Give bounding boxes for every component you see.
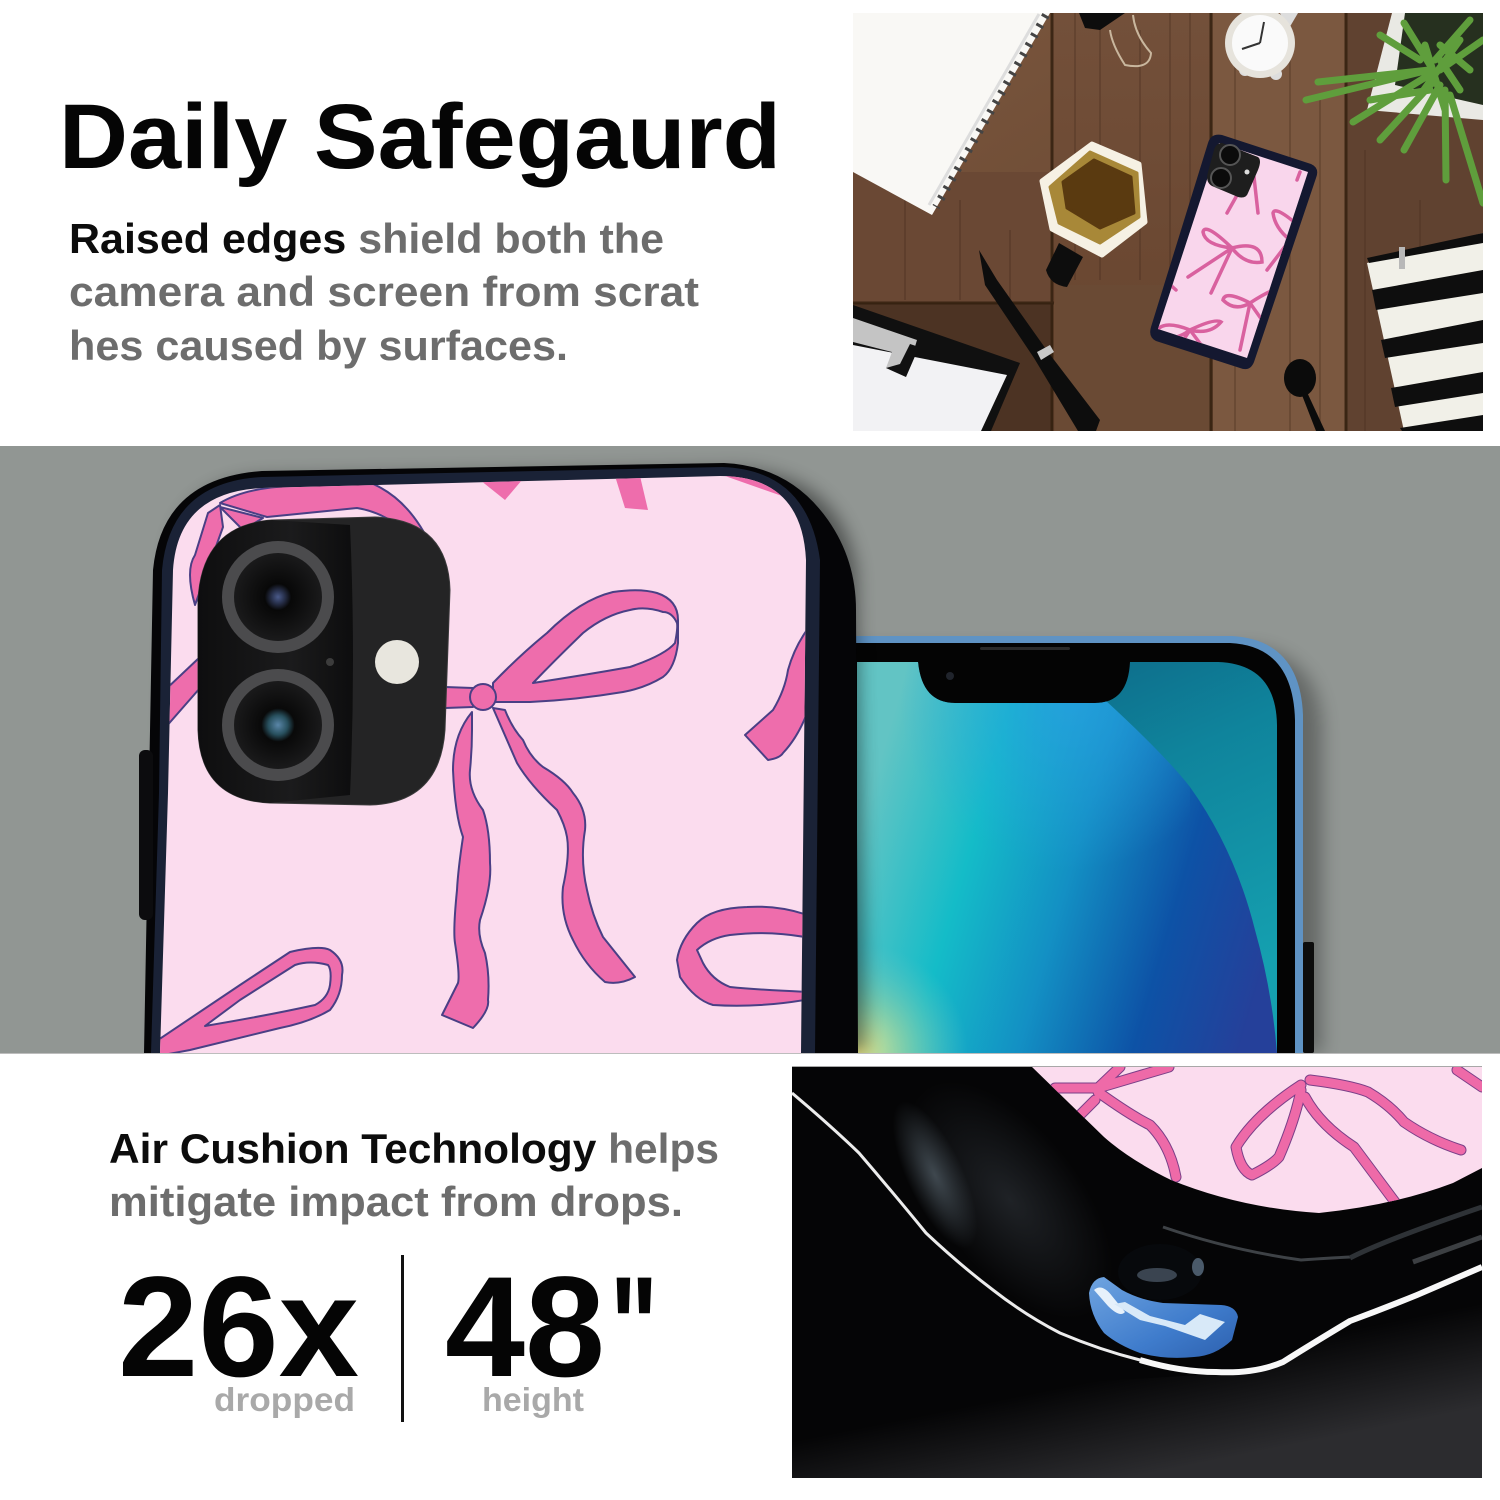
heading block (59, 86, 781, 369)
panel: air cushion close-up (792, 1066, 1482, 1478)
lower-left loop (158, 948, 342, 1056)
clipboard (853, 305, 1020, 431)
front phone (820, 636, 1322, 1055)
ribbons (158, 476, 810, 1056)
bottom-right grey sheen (792, 1269, 1482, 1478)
flash (375, 640, 419, 684)
divider (401, 1255, 404, 1422)
stat: 48 inches height (445, 1248, 658, 1418)
camera module (198, 517, 450, 805)
text block: raised edges (69, 215, 699, 369)
big bow loop (493, 590, 678, 702)
top-left bow (219, 485, 424, 532)
text block: air cushion (109, 1125, 719, 1225)
top stubs (482, 481, 521, 500)
lower text and stats (109, 1125, 719, 1422)
upper highlight edge (1163, 1227, 1350, 1260)
white rim line (792, 1093, 1216, 1372)
small phone (1150, 135, 1317, 369)
big bow left stub (445, 687, 473, 708)
panel: grey band with phones (0, 446, 1500, 1053)
text block: raised edges: Raised edges shield both the (69, 215, 664, 262)
text block: raised edges: camera and screen from scrat (69, 268, 699, 315)
text block: air cushion: mitigate impact from drops. (109, 1178, 683, 1225)
lower-right loop (677, 907, 810, 1006)
case back (160, 476, 806, 1053)
case shadow (160, 470, 866, 1053)
text block: raised edges: hes caused by surfaces. (69, 322, 568, 369)
plant (1306, 13, 1483, 203)
lens: upper (222, 541, 334, 653)
pen (979, 250, 1100, 431)
left tail (442, 712, 490, 1028)
text block: air cushion: Air Cushion Technology helps (109, 1125, 719, 1172)
notebook (853, 13, 1050, 215)
band sheen (869, 1047, 1151, 1353)
striped notebook (1367, 233, 1483, 431)
lens: lower (222, 669, 334, 781)
spoon (1284, 359, 1325, 431)
screen (850, 655, 1290, 1055)
stat: 48 inches height: 48 (445, 1248, 605, 1407)
stat: 26x dropped: dropped (214, 1381, 355, 1418)
close-up case back (1031, 1066, 1482, 1213)
air cushion bubble (1089, 1244, 1238, 1358)
stat: 26x dropped: 26x (118, 1248, 359, 1407)
small bows (1055, 1067, 1482, 1202)
phone case (139, 463, 858, 1056)
right tail (493, 708, 635, 983)
stat: 48 inches height: " (610, 1248, 658, 1407)
coffee cup (1042, 144, 1145, 287)
title: Daily Safegaurd (59, 86, 781, 188)
stat: 48 inches height: height (482, 1381, 584, 1418)
panel: desk photo (853, 13, 1483, 431)
right bow piece (745, 626, 810, 760)
binder clip and clock (1079, 8, 1298, 80)
band edge line (0, 1053, 1500, 1054)
